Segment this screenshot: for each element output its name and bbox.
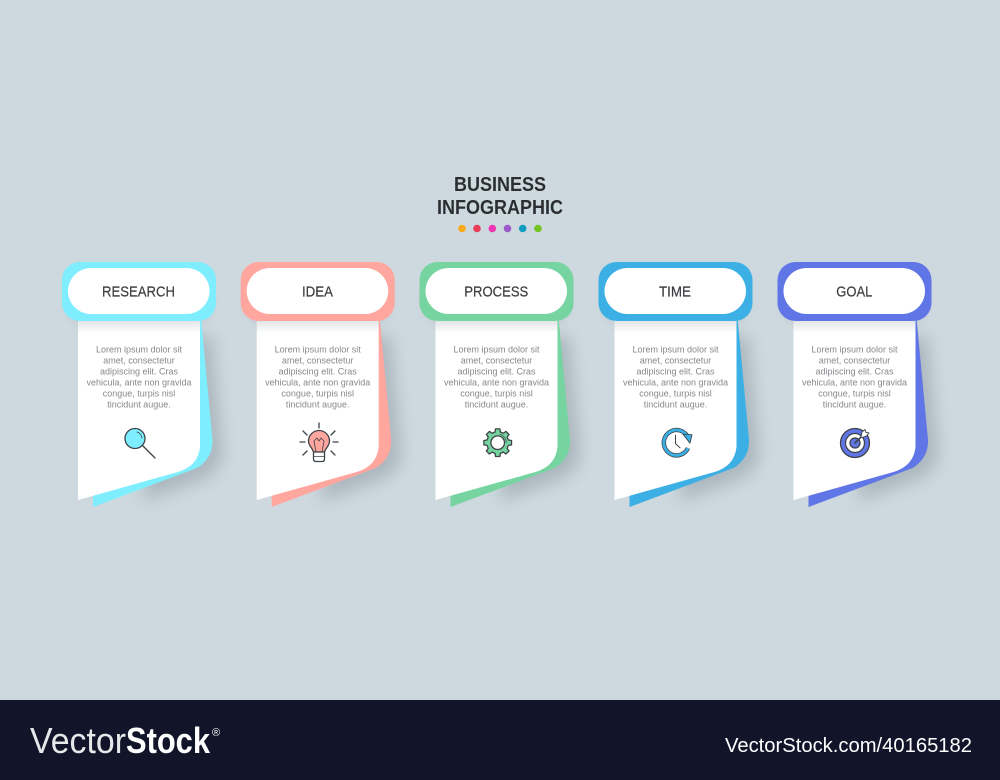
icon: gear: [484, 429, 512, 457]
text block: process: amet, consectetur: [461, 356, 532, 366]
title dots: [458, 225, 542, 232]
text block: process: adipiscing elit. Cras: [457, 366, 536, 376]
text block: research: vehicula, ante non gravida: [86, 378, 192, 388]
text block: research: Lorem ipsum dolor sit: [96, 344, 183, 354]
footer logo: Stock: [126, 720, 211, 761]
text block: idea: [265, 344, 370, 410]
text block: process: vehicula, ante non gravida: [444, 378, 549, 388]
text block: idea: vehicula, ante non gravida: [265, 378, 370, 388]
icon: clock with arrow: [660, 426, 693, 460]
text block: goal: congue, turpis nisl: [818, 388, 891, 398]
icon: magnifying glass: [125, 428, 155, 458]
footer bar: [0, 700, 1000, 780]
text block: time: congue, turpis nisl: [639, 388, 712, 398]
text block: goal: adipiscing elit. Cras: [815, 366, 894, 376]
text block: goal: amet, consectetur: [819, 356, 890, 366]
icon: target with arrow: [840, 428, 870, 458]
text block: process: tincidunt augue.: [465, 400, 528, 410]
footer image id: VectorStock.com/40165182: [725, 735, 972, 757]
text block: goal: [802, 344, 907, 410]
text block: research: congue, turpis nisl: [103, 388, 175, 398]
heading: research: RESEARCH: [102, 284, 175, 300]
text block: process: [444, 344, 549, 410]
footer logo: [30, 720, 220, 761]
text block: time: vehicula, ante non gravida: [623, 378, 728, 388]
heading: time: TIME: [659, 284, 691, 300]
text block: research: tincidunt augue.: [107, 400, 171, 410]
panel: process: [420, 262, 580, 507]
text block: time: tincidunt augue.: [644, 400, 707, 410]
heading: process: PROCESS: [464, 284, 528, 300]
text block: idea: Lorem ipsum dolor sit: [275, 344, 361, 354]
heading: idea: IDEA: [302, 284, 333, 300]
text block: idea: congue, turpis nisl: [281, 388, 354, 398]
text block: time: adipiscing elit. Cras: [636, 366, 715, 376]
text block: idea: adipiscing elit. Cras: [279, 366, 357, 376]
panel: research: [62, 262, 223, 507]
footer logo: Vector: [30, 720, 126, 761]
title: [437, 174, 563, 219]
heading: goal: GOAL: [836, 284, 872, 300]
text block: time: [623, 344, 728, 410]
text block: research: adipiscing elit. Cras: [100, 366, 179, 376]
text block: process: Lorem ipsum dolor sit: [453, 344, 540, 354]
text block: research: [86, 344, 192, 410]
text block: idea: tincidunt augue.: [286, 400, 349, 410]
panel: time: [598, 262, 760, 507]
text block: research: amet, consectetur: [103, 356, 175, 366]
panel: goal: [778, 262, 938, 507]
icon: light bulb: [300, 423, 338, 462]
text block: goal: vehicula, ante non gravida: [802, 378, 907, 388]
footer logo: ®: [212, 727, 220, 739]
text block: process: congue, turpis nisl: [460, 388, 533, 398]
text block: idea: amet, consectetur: [282, 356, 353, 366]
text block: goal: Lorem ipsum dolor sit: [811, 344, 898, 354]
title: BUSINESS: [454, 174, 546, 196]
text block: time: amet, consectetur: [640, 356, 711, 366]
text block: time: Lorem ipsum dolor sit: [632, 344, 719, 354]
panel: idea: [241, 262, 402, 507]
title: INFOGRAPHIC: [437, 197, 563, 219]
text block: goal: tincidunt augue.: [823, 400, 886, 410]
